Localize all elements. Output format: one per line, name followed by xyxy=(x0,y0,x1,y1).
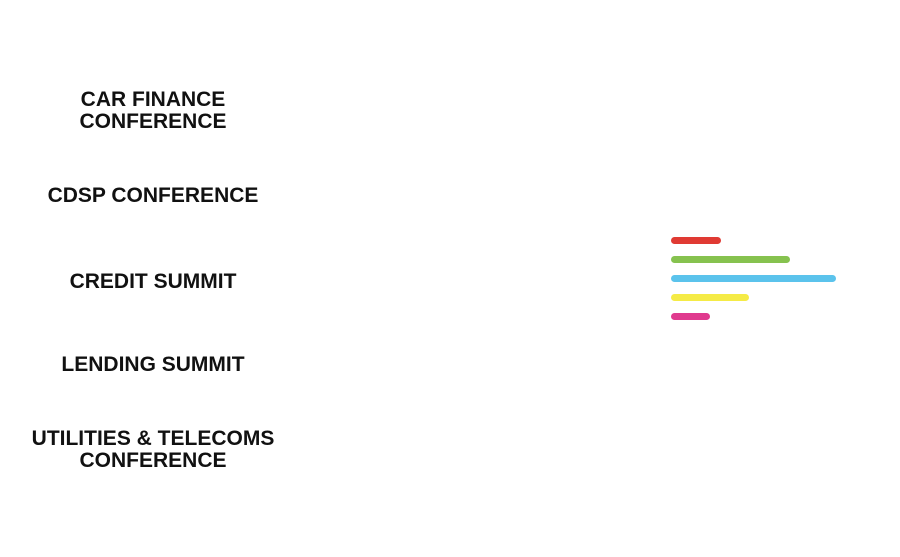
label: car finance conference: CONFERENCE xyxy=(79,110,226,133)
bar: green xyxy=(671,256,790,263)
label: car finance conference: CAR FINANCE xyxy=(81,88,225,111)
label: utilities & telecoms conference: CONFERENCE xyxy=(79,449,226,472)
label: car finance conference xyxy=(79,88,226,133)
label: cdsp conference: CDSP CONFERENCE xyxy=(48,184,258,207)
label: utilities & telecoms conference xyxy=(32,427,274,472)
label: lending summit: LENDING SUMMIT xyxy=(61,353,245,376)
bar: yellow xyxy=(671,294,749,301)
bar: red xyxy=(671,237,721,244)
bar: pink xyxy=(671,313,710,320)
bar chart xyxy=(671,237,836,320)
label: utilities & telecoms conference: UTILITIES & TELECOMS xyxy=(32,427,274,450)
label: credit summit: CREDIT SUMMIT xyxy=(70,270,236,293)
bar: blue xyxy=(671,275,836,282)
